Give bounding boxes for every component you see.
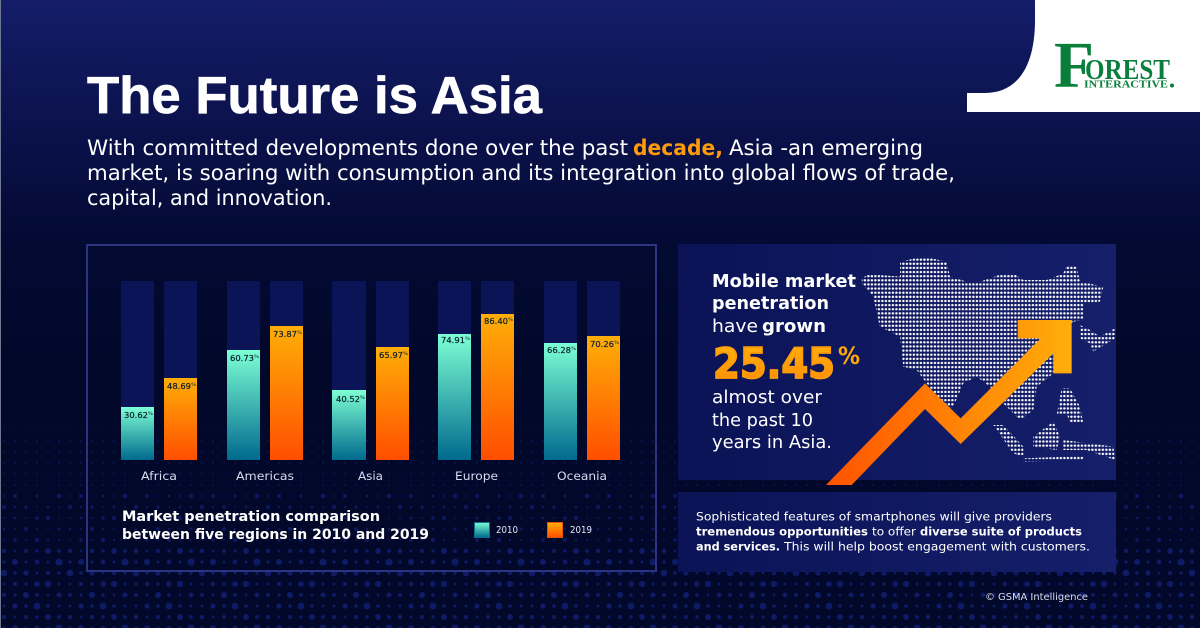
- region labels: Europe: [455, 469, 498, 483]
- chart caption: [122, 509, 429, 543]
- bars: Europe: %: [508, 317, 513, 322]
- title: The Future is Asia: [87, 67, 543, 125]
- legend: 2010: [496, 525, 518, 536]
- panel text: Sophisticated features of smartphones will give providers: [696, 510, 1052, 524]
- panel background: [678, 244, 1116, 480]
- bars: Asia: 65.97: [379, 350, 403, 360]
- chart caption: between five regions in 2010 and 2019: [122, 527, 429, 543]
- bars: Europe: [438, 314, 514, 460]
- key figure: 25.45: [713, 339, 835, 388]
- headline text: Mobile market: [712, 271, 856, 292]
- bars: Asia: %: [403, 351, 408, 356]
- intro paragraph: Asia -an emerging: [729, 136, 923, 160]
- dotted map of Asia: [857, 253, 1117, 463]
- bars: Asia: 40.52: [336, 394, 360, 404]
- panel: mobile market growth: [678, 244, 1117, 485]
- intro paragraph: decade,: [633, 136, 723, 160]
- headline text: grown: [762, 316, 826, 337]
- bars: Americas: %: [297, 330, 302, 335]
- bars: Oceania: 70.26: [590, 339, 614, 349]
- region labels: Americas: [236, 469, 294, 483]
- bars: Americas: 60.73: [230, 353, 254, 363]
- legend: 2019: [570, 525, 592, 536]
- bars: Americas: 73.87: [273, 329, 297, 339]
- chart frame: [87, 245, 656, 571]
- headline text: have: [712, 316, 758, 337]
- bars: Africa: [121, 378, 197, 460]
- bars: Oceania: %: [614, 340, 619, 345]
- region labels: Oceania: [557, 469, 607, 483]
- region labels: [141, 469, 607, 483]
- bars: Oceania: 66.28: [547, 345, 571, 355]
- logo: Forest Interactive: F: [1054, 29, 1094, 102]
- supporting text: years in Asia.: [712, 432, 832, 453]
- logo: Forest Interactive: OREST: [1085, 54, 1170, 86]
- bars: Africa: 30.62: [124, 410, 148, 420]
- panel text: tremendous opportunities: [696, 524, 868, 538]
- white corner tab: [967, 0, 1200, 112]
- bar tracks: [121, 281, 620, 460]
- bars: Oceania: [544, 336, 620, 460]
- region labels: Asia: [358, 469, 383, 483]
- bars: Africa: %: [148, 411, 153, 416]
- panel background: [678, 492, 1116, 572]
- supporting text: almost over: [712, 387, 823, 408]
- region labels: Africa: [141, 469, 177, 483]
- intro paragraph: With committed developments done over the past: [87, 136, 628, 160]
- bars: Americas: %: [254, 354, 259, 359]
- bars: Africa: %: [191, 382, 196, 387]
- bars: Asia: %: [360, 395, 365, 400]
- intro paragraph: [87, 136, 955, 210]
- logo block: [967, 0, 1200, 112]
- bars: Europe: 86.40: [484, 316, 508, 326]
- intro paragraph: capital, and innovation.: [87, 186, 332, 210]
- bars: Africa: 48.69: [167, 381, 191, 391]
- logo: Forest Interactive: INTERACTIVE: [1084, 80, 1168, 90]
- bars: Oceania: %: [571, 346, 576, 351]
- panel: smartphone opportunities: [678, 492, 1116, 572]
- source credit: © GSMA Intelligence: [985, 592, 1088, 603]
- panel: market penetration chart: [87, 245, 656, 571]
- bars: Asia: [332, 347, 409, 460]
- supporting text: [712, 387, 832, 453]
- growth arrow: [826, 320, 1072, 485]
- bars: Americas: [227, 326, 303, 460]
- legend: [474, 522, 592, 538]
- panel text: and services.: [696, 540, 780, 554]
- chart caption: Market penetration comparison: [122, 509, 380, 525]
- panel text: diverse suite of products: [920, 524, 1082, 538]
- supporting text: the past 10: [712, 410, 813, 431]
- logo: Forest Interactive: [1054, 29, 1174, 102]
- bars: Europe: %: [465, 336, 470, 341]
- background dot pattern: [0, 430, 1200, 628]
- intro paragraph: market, is soaring with consumption and its integration into global flows of trade,: [87, 161, 955, 185]
- headline text: penetration: [712, 293, 829, 314]
- panel text: [696, 510, 1090, 554]
- panel text: This will help boost engagement with customers.: [783, 540, 1090, 554]
- headline text: [712, 271, 856, 337]
- panel text: to offer: [872, 524, 916, 538]
- key figure: %: [838, 342, 860, 370]
- bars: Europe: 74.91: [441, 335, 465, 345]
